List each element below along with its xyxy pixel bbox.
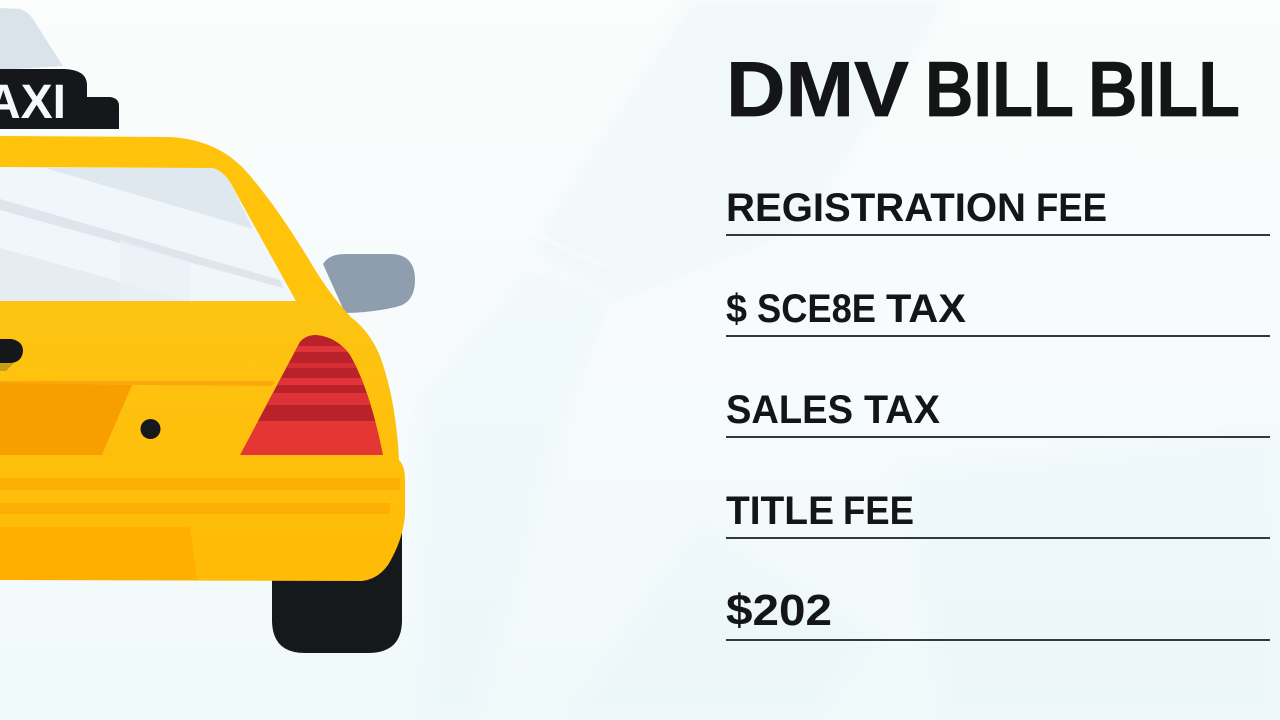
row: sales tax: SALES bbox=[726, 388, 853, 432]
tail light bbox=[240, 335, 383, 455]
rear window bbox=[0, 167, 296, 301]
row: total: $202 bbox=[726, 586, 832, 635]
car body bbox=[0, 301, 405, 581]
row: garbled tax bbox=[726, 287, 1270, 337]
title: BILL bbox=[1088, 45, 1240, 133]
taxi roof sign bbox=[0, 69, 119, 129]
row: garbled tax: $ bbox=[726, 287, 747, 331]
title: DMV bbox=[726, 45, 909, 133]
bill list bbox=[726, 186, 1270, 641]
trunk lock bbox=[140, 419, 160, 439]
row: title fee: TITLE bbox=[726, 489, 834, 533]
bumper stripes bbox=[0, 478, 400, 490]
row: registration fee: REGISTRATION bbox=[726, 186, 1026, 230]
roof beacon shadow bbox=[0, 8, 63, 70]
illustration: rear of yellow taxi bbox=[0, 8, 415, 653]
row: garbled tax: TAX bbox=[886, 287, 966, 331]
trunk handle bbox=[0, 339, 23, 371]
row: title fee: FEE bbox=[843, 489, 914, 533]
title bbox=[726, 45, 1240, 133]
licence plate recess bbox=[0, 383, 132, 455]
row: registration fee: FEE bbox=[1036, 186, 1107, 230]
title: BILL bbox=[925, 45, 1074, 133]
row: registration fee bbox=[726, 186, 1270, 236]
row: sales tax bbox=[726, 388, 1270, 438]
lower bumper recess bbox=[0, 527, 197, 580]
side mirror bbox=[323, 254, 415, 313]
trunk crease line bbox=[0, 381, 275, 386]
row: title fee bbox=[726, 489, 1270, 539]
car cabin frame bbox=[0, 136, 350, 340]
row: garbled tax: SCE8E bbox=[757, 287, 876, 331]
rear wheel bbox=[272, 530, 402, 653]
row: sales tax: TAX bbox=[864, 388, 940, 432]
